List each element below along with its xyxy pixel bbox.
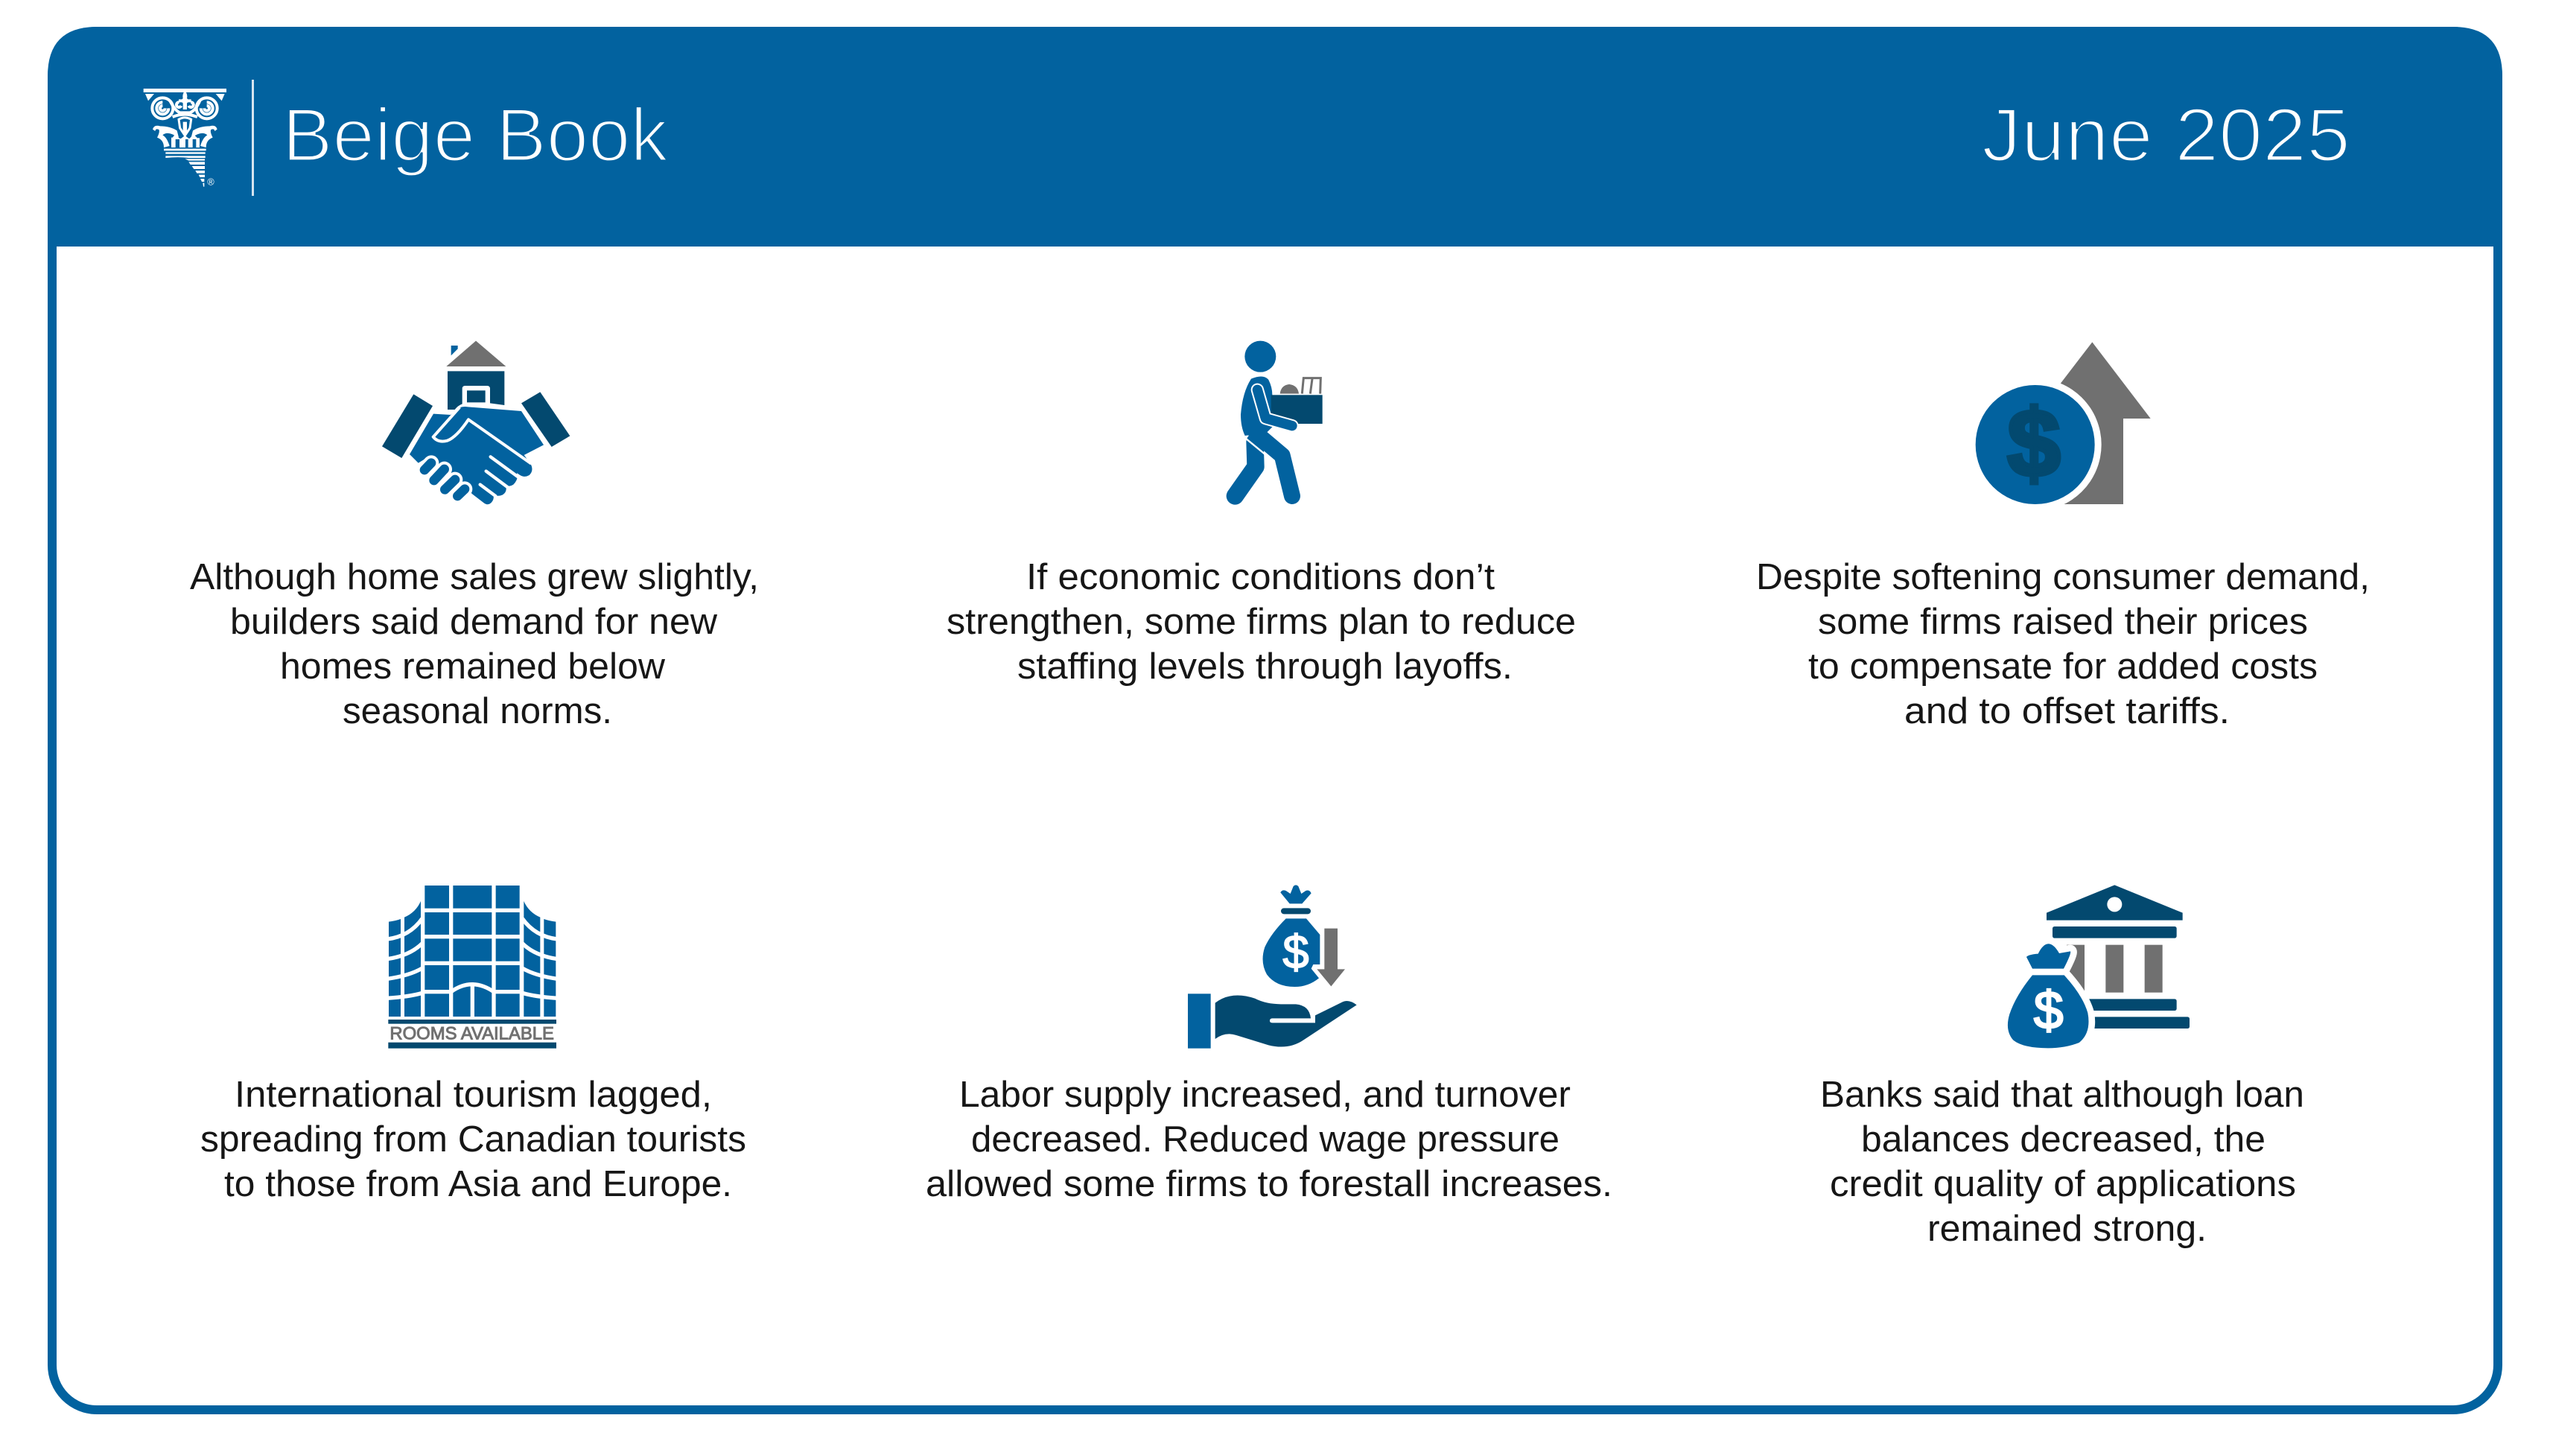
title: Beige Book: Beige Book: [282, 94, 668, 177]
panel: prices: [1756, 342, 2370, 731]
date: June 2025: June 2025: [1982, 94, 2350, 177]
text: prices: to compensate for added costs: [1808, 646, 2318, 687]
text: prices: [1756, 556, 2370, 731]
icon: Corinthian column logo: [144, 89, 226, 187]
text: labor supply: [926, 1074, 1612, 1204]
hotel right wing: [522, 901, 557, 1017]
text: banks: credit quality of applications: [1830, 1163, 2296, 1204]
icon: dollar coin with up arrow: [1969, 342, 2151, 511]
icon: bank with money bag: $: [2034, 981, 2064, 1040]
text: home sales: [190, 556, 759, 731]
icon: bank with money bag: [2008, 885, 2190, 1048]
icon: hotel rooms available: [387, 886, 557, 1049]
text: banks: balances decreased, the: [1861, 1119, 2266, 1160]
panel: home sales: [190, 341, 759, 731]
panel: tourism: [200, 886, 746, 1204]
text: tourism: International tourism lagged,: [235, 1074, 712, 1115]
text: tourism: to those from Asia and Europe.: [224, 1163, 732, 1204]
text: prices: and to offset tariffs.: [1904, 690, 2230, 731]
text: tourism: spreading from Canadian tourists: [200, 1119, 746, 1160]
text: layoffs: [947, 556, 1576, 687]
icon: person carrying box: [1235, 341, 1323, 496]
hotel left wing: [387, 901, 422, 1017]
panel: header band: [48, 27, 2502, 247]
icon: hand with money bag and down arrow: $: [1282, 926, 1309, 979]
text: labor supply: allowed some firms to forestall increases.: [926, 1163, 1612, 1204]
icon: hotel rooms available: ROOMS AVAILABLE: [390, 1024, 554, 1044]
panel: labor supply: [926, 885, 1612, 1204]
icon: Corinthian column logo: ®: [207, 177, 214, 187]
text: home sales: homes remained below: [280, 646, 665, 687]
divider: [252, 80, 254, 196]
text: banks: [1820, 1074, 2304, 1249]
text: layoffs: staffing levels through layoffs.: [1017, 646, 1513, 687]
text: banks: Banks said that although loan: [1820, 1074, 2304, 1115]
icon: handshake and house: [382, 341, 570, 504]
panel: banks: [1820, 885, 2304, 1249]
text: prices: some firms raised their prices: [1818, 601, 2308, 642]
text: home sales: seasonal norms.: [343, 690, 612, 731]
text: prices: Despite softening consumer demand,: [1756, 556, 2370, 597]
text: home sales: Although home sales grew slightly,: [190, 556, 759, 597]
text: banks: remained strong.: [1927, 1208, 2207, 1249]
text: labor supply: decreased. Reduced wage pressure: [971, 1119, 1559, 1160]
panel: layoffs: [947, 341, 1576, 687]
text: tourism: [200, 1074, 746, 1204]
text: labor supply: Labor supply increased, and turnover: [959, 1074, 1571, 1115]
icon: dollar coin with up arrow: $: [2007, 390, 2061, 497]
text: layoffs: If economic conditions don’t: [1026, 556, 1495, 597]
text: home sales: builders said demand for new: [230, 601, 717, 642]
icon: hand with money bag and down arrow: [1188, 885, 1357, 1049]
text: layoffs: strengthen, some firms plan to reduce: [947, 601, 1576, 642]
